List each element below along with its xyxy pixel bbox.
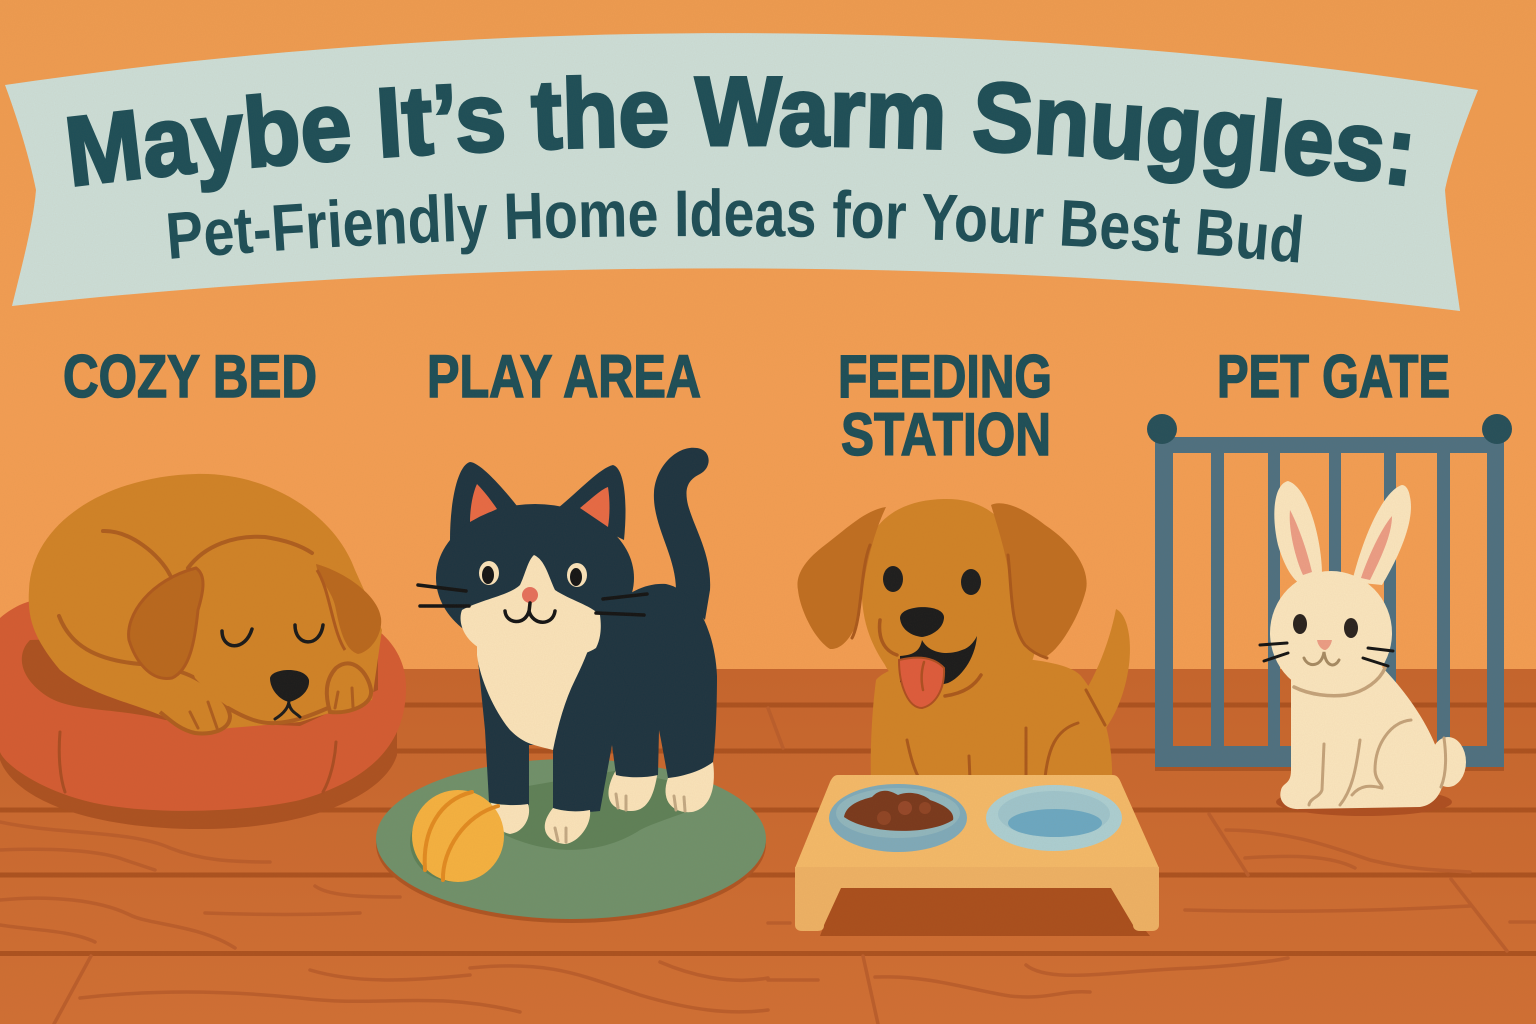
- table legs: [795, 868, 1159, 931]
- rabbit eyes: [1293, 614, 1358, 638]
- cat front paws: [491, 803, 590, 844]
- cozy bed with sleeping dog: [0, 474, 406, 829]
- dog body lines: [907, 690, 1105, 780]
- rabbit shadow: [1276, 788, 1452, 816]
- dog front paw left: [140, 672, 230, 733]
- feeding table: [795, 775, 1159, 936]
- standing dog: [797, 499, 1130, 780]
- dog head: [862, 499, 1035, 691]
- label: pet gate: PET GATE: [1217, 343, 1450, 410]
- table top: [795, 775, 1159, 868]
- pet gate: [1147, 414, 1512, 771]
- cat chest: [477, 610, 600, 750]
- cat white face: [461, 555, 601, 660]
- rabbit leg lines: [1309, 720, 1446, 805]
- dog ear right: [316, 564, 381, 654]
- dog ear right: [991, 503, 1087, 657]
- rabbit: [1260, 481, 1466, 816]
- dog chin outline: [228, 708, 328, 723]
- dog nose: [900, 607, 944, 637]
- water bowl: [986, 785, 1122, 851]
- cat head: [436, 504, 634, 652]
- dog body: [871, 657, 1112, 780]
- rabbit nose: [1317, 640, 1332, 650]
- rabbit tail: [1430, 737, 1466, 787]
- rabbit whiskers: [1260, 643, 1393, 666]
- table shadow: [820, 888, 1150, 936]
- dog nose: [270, 670, 309, 702]
- cat nose: [522, 587, 538, 603]
- dog ear left: [129, 568, 203, 678]
- label: play area: PLAY AREA: [427, 343, 701, 410]
- dog ear left: [797, 507, 886, 649]
- play rug: [376, 759, 766, 923]
- cat back legs: [590, 584, 717, 778]
- rabbit collar line: [1294, 668, 1385, 696]
- title banner: [5, 33, 1478, 311]
- rabbit mouth: [1304, 652, 1339, 665]
- dog eyes: [883, 566, 981, 595]
- dog tail: [1086, 609, 1130, 728]
- bed cushion: [0, 600, 406, 829]
- dog mouth: [900, 636, 977, 690]
- dog tongue: [899, 658, 944, 708]
- dog head: [183, 557, 333, 722]
- subtitle: Pet-Friendly Home Ideas for Your Best Bud: [168, 188, 1302, 262]
- cat eyes: [479, 561, 587, 587]
- label: feeding station: STATION: [841, 401, 1051, 468]
- title: Maybe It’s the Warm Snuggles:: [66, 74, 1410, 193]
- cat back leg paws: [608, 762, 714, 812]
- label: feeding station: FEEDING: [838, 343, 1052, 410]
- cat ears: [450, 462, 626, 540]
- cat body: [477, 620, 630, 812]
- cat tail: [654, 448, 710, 620]
- cat inner ears: [470, 484, 610, 527]
- closed eyes: [222, 625, 323, 646]
- food bowl: [829, 784, 967, 852]
- dog front paw right: [327, 663, 371, 712]
- rabbit head: [1270, 571, 1392, 695]
- ball: [410, 790, 504, 882]
- cat: [418, 448, 717, 844]
- gate knobs: [1147, 414, 1512, 444]
- rabbit ears: [1274, 481, 1411, 585]
- rabbit body: [1280, 665, 1443, 809]
- label: cozy bed: COZY BED: [63, 343, 317, 410]
- rug shadow: [505, 770, 712, 850]
- wooden floor: [0, 669, 1536, 1024]
- cat whiskers: [418, 585, 647, 615]
- table front: [795, 867, 1159, 888]
- body fold lines: [59, 531, 312, 664]
- dog mouth: [275, 700, 300, 719]
- dog body: [29, 474, 382, 733]
- wall background: [0, 0, 1536, 670]
- cat mouth: [505, 603, 555, 622]
- dog smile lines: [880, 620, 981, 696]
